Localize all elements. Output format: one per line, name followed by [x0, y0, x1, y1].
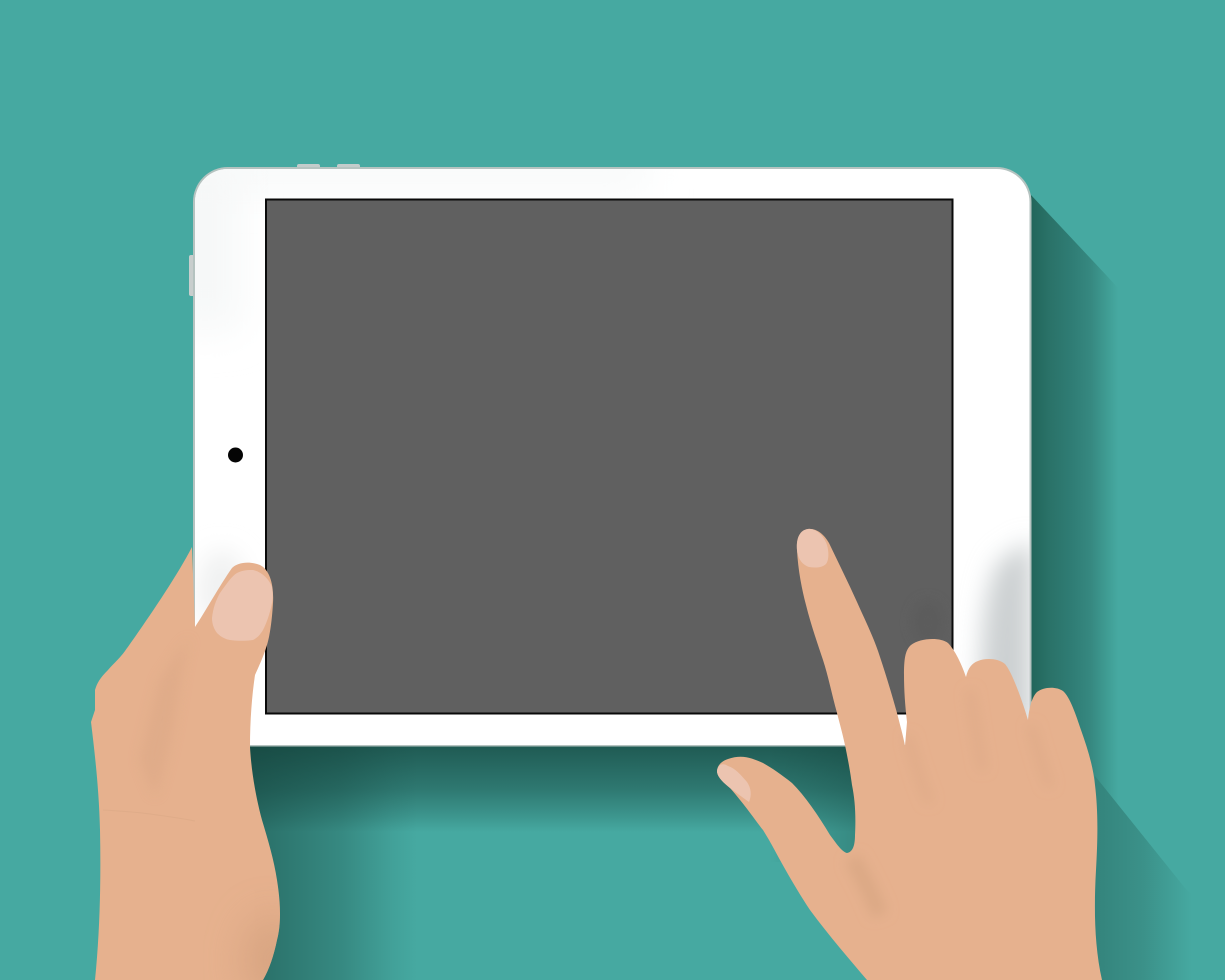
long shadow: right of tablet	[1031, 195, 1118, 805]
thumbnail	[212, 570, 273, 641]
long shadow: right hand	[1095, 776, 1192, 980]
tablet	[170, 150, 1032, 746]
home button	[228, 448, 243, 462]
side button	[189, 255, 196, 296]
top buttons	[297, 164, 360, 170]
tablet casing	[193, 167, 1032, 746]
pointing fingernail	[797, 529, 828, 568]
long shadow: below tablet	[250, 746, 856, 980]
right hand shape	[717, 529, 1102, 980]
screen smudge	[912, 600, 944, 644]
illustration: hands holding a tablet	[91, 164, 1176, 980]
left hand	[91, 547, 300, 980]
wrist crease	[103, 810, 195, 821]
thumb nail	[717, 764, 751, 802]
left hand shape	[91, 547, 280, 980]
right hand	[717, 529, 1102, 980]
bezel shading	[170, 150, 1032, 730]
screen	[266, 200, 952, 714]
finger creases	[854, 864, 879, 908]
bezel glare near right hand	[975, 540, 1032, 730]
hand shading	[248, 922, 280, 980]
tablet face	[195, 169, 1030, 745]
